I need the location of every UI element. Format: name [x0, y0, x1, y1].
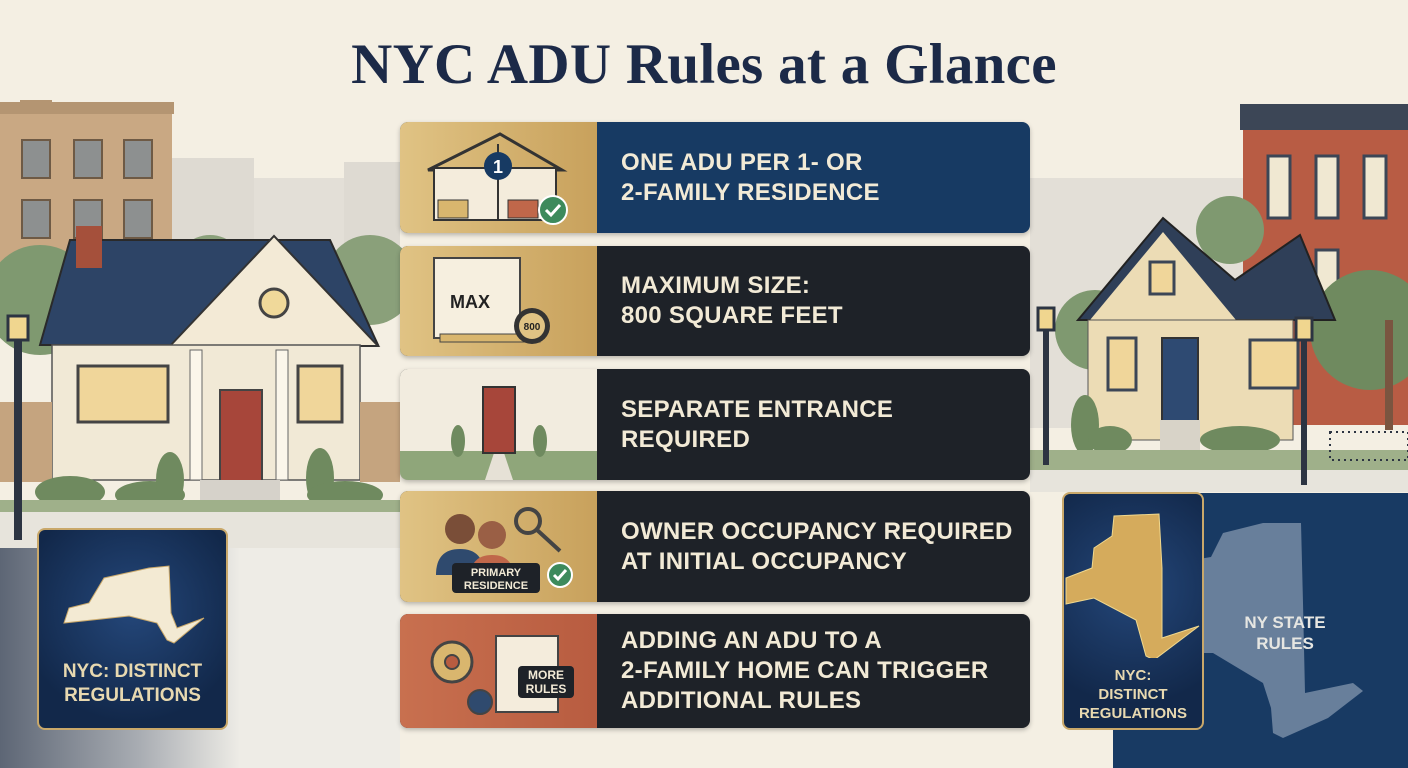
row 2	[400, 246, 1030, 356]
row 4	[400, 491, 1030, 602]
icon: gears and documents: MORE	[528, 668, 564, 682]
icon: gears and documents	[400, 614, 597, 728]
label: NY state rules: NY STATE	[1244, 613, 1326, 632]
card: left NYC distinct regulations: NYC: DISTINCT	[63, 661, 202, 682]
text: ADDITIONAL RULES	[621, 687, 861, 714]
icon: gold NY map	[1066, 514, 1200, 658]
row 1	[400, 122, 1030, 233]
road	[0, 548, 400, 768]
text	[621, 627, 989, 714]
text: 2-FAMILY HOME CAN TRIGGER	[621, 657, 989, 684]
icon: floor plan + tape: MAX	[450, 292, 490, 312]
icon: owners with key: RESIDENCE	[464, 580, 528, 592]
navy region	[1113, 493, 1408, 768]
text: 2-FAMILY RESIDENCE	[621, 178, 880, 206]
text	[621, 518, 1013, 574]
map: NY state silhouette	[1204, 523, 1363, 738]
card: right NYC distinct regulations: REGULATIONS	[1079, 705, 1187, 722]
text: SEPARATE ENTRANCE	[621, 396, 893, 422]
icon: gears and documents: RULES	[526, 682, 566, 696]
text: AT INITIAL OCCUPANCY	[621, 548, 907, 574]
icon: owners with key: PRIMARY	[471, 567, 522, 579]
text	[621, 272, 843, 329]
icon: owners with key	[400, 491, 597, 602]
row 5	[400, 614, 1030, 728]
icon: door	[400, 369, 597, 480]
card: right NYC distinct regulations	[1062, 492, 1204, 730]
text: OWNER OCCUPANCY REQUIRED	[621, 518, 1013, 544]
icon: house with one ADU	[400, 122, 597, 233]
card: right NYC distinct regulations: NYC:	[1115, 667, 1151, 684]
card: left NYC distinct regulations	[37, 528, 228, 730]
right background	[1030, 104, 1408, 492]
icon: NY map	[63, 566, 204, 644]
row 3	[400, 369, 1030, 480]
icon: floor plan + tape	[400, 246, 597, 356]
label: NY state rules: RULES	[1256, 634, 1314, 653]
card: right NYC distinct regulations: DISTINCT	[1098, 686, 1168, 703]
icon: floor plan + tape: 800	[524, 322, 541, 333]
text: 800 SQUARE FEET	[621, 302, 843, 329]
left house	[0, 226, 400, 548]
icon: house with one ADU: 1	[493, 157, 503, 177]
text: MAXIMUM SIZE:	[621, 272, 810, 299]
title: NYC ADU Rules at a Glance	[351, 33, 1057, 96]
card: left NYC distinct regulations: REGULATIONS	[64, 685, 201, 706]
left buildings	[0, 100, 415, 355]
text: REQUIRED	[621, 426, 750, 452]
text	[621, 148, 880, 206]
text: ADDING AN ADU TO A	[621, 627, 882, 654]
text: ONE ADU PER 1- OR	[621, 148, 863, 176]
text	[621, 396, 893, 452]
label: NY state rules	[1244, 613, 1326, 653]
